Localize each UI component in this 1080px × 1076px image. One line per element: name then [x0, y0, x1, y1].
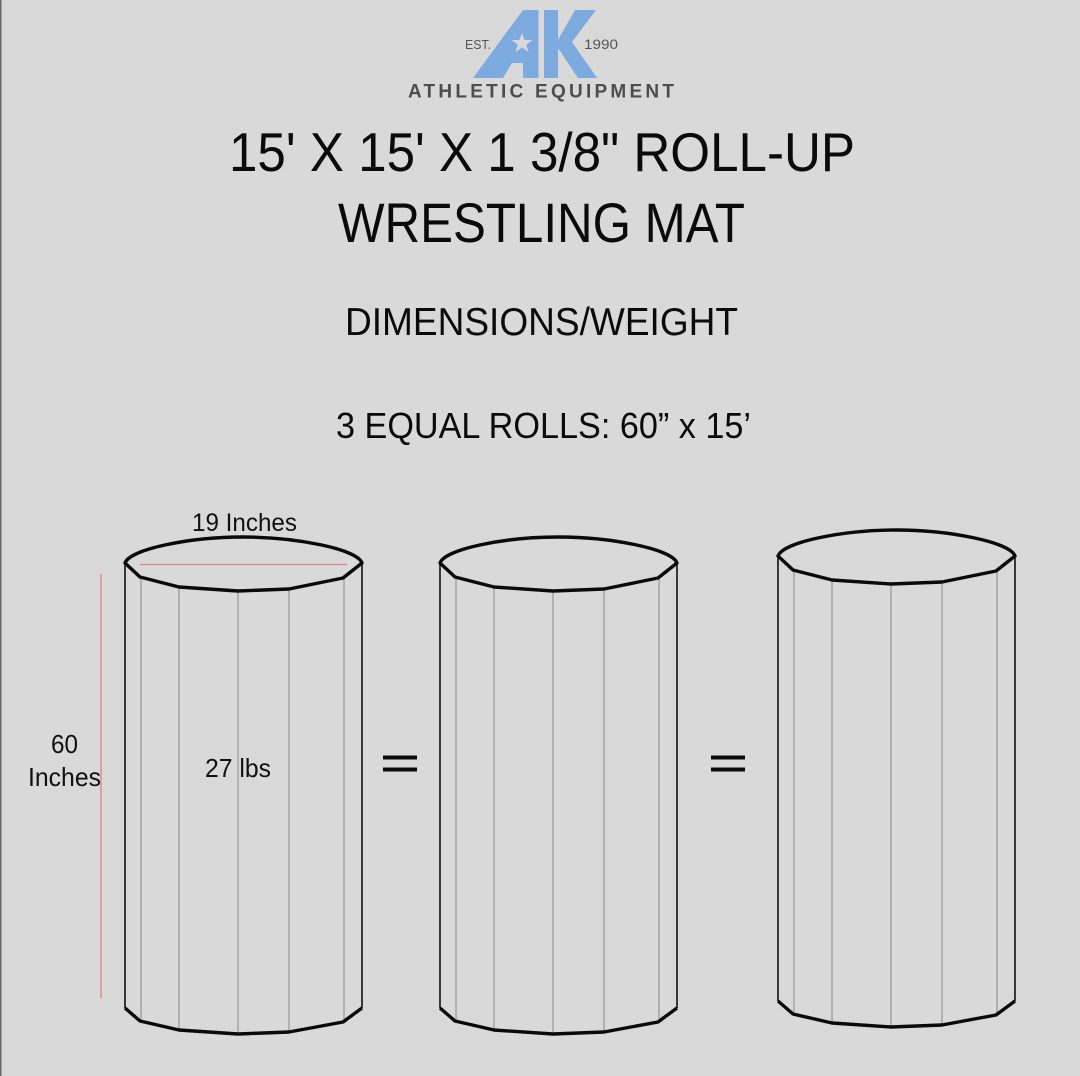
height label: 60 — [51, 729, 78, 759]
equals sign 2 — [711, 758, 745, 770]
height line — [100, 574, 102, 998]
roll 1 cylinder — [125, 537, 362, 1034]
weight label: 27 lbs — [205, 753, 271, 783]
title — [229, 121, 855, 254]
diameter line — [140, 564, 347, 566]
logo letter A — [473, 10, 538, 78]
title: WRESTLING MAT — [338, 191, 745, 254]
year label: 1990 — [584, 36, 618, 52]
subtitle: dimensions and weight: DIMENSIONS/WEIGHT — [345, 301, 738, 344]
company name: ATHLETIC EQUIPMENT — [408, 82, 674, 102]
height label: Inches — [28, 762, 101, 792]
equals sign 1 — [383, 758, 417, 770]
logo — [408, 10, 674, 102]
roll 2 cylinder — [440, 537, 677, 1034]
established label: EST. — [465, 37, 491, 52]
subtitle: roll count: 3 EQUAL ROLLS: 60” x 15’ — [336, 405, 751, 446]
title: 15' X 15' X 1 3/8" ROLL-UP — [229, 121, 855, 183]
icon: star — [512, 33, 532, 52]
diameter label: 19 Inches — [192, 509, 297, 537]
logo letter K — [544, 10, 597, 78]
height label — [28, 729, 101, 792]
roll 3 cylinder — [778, 530, 1015, 1027]
